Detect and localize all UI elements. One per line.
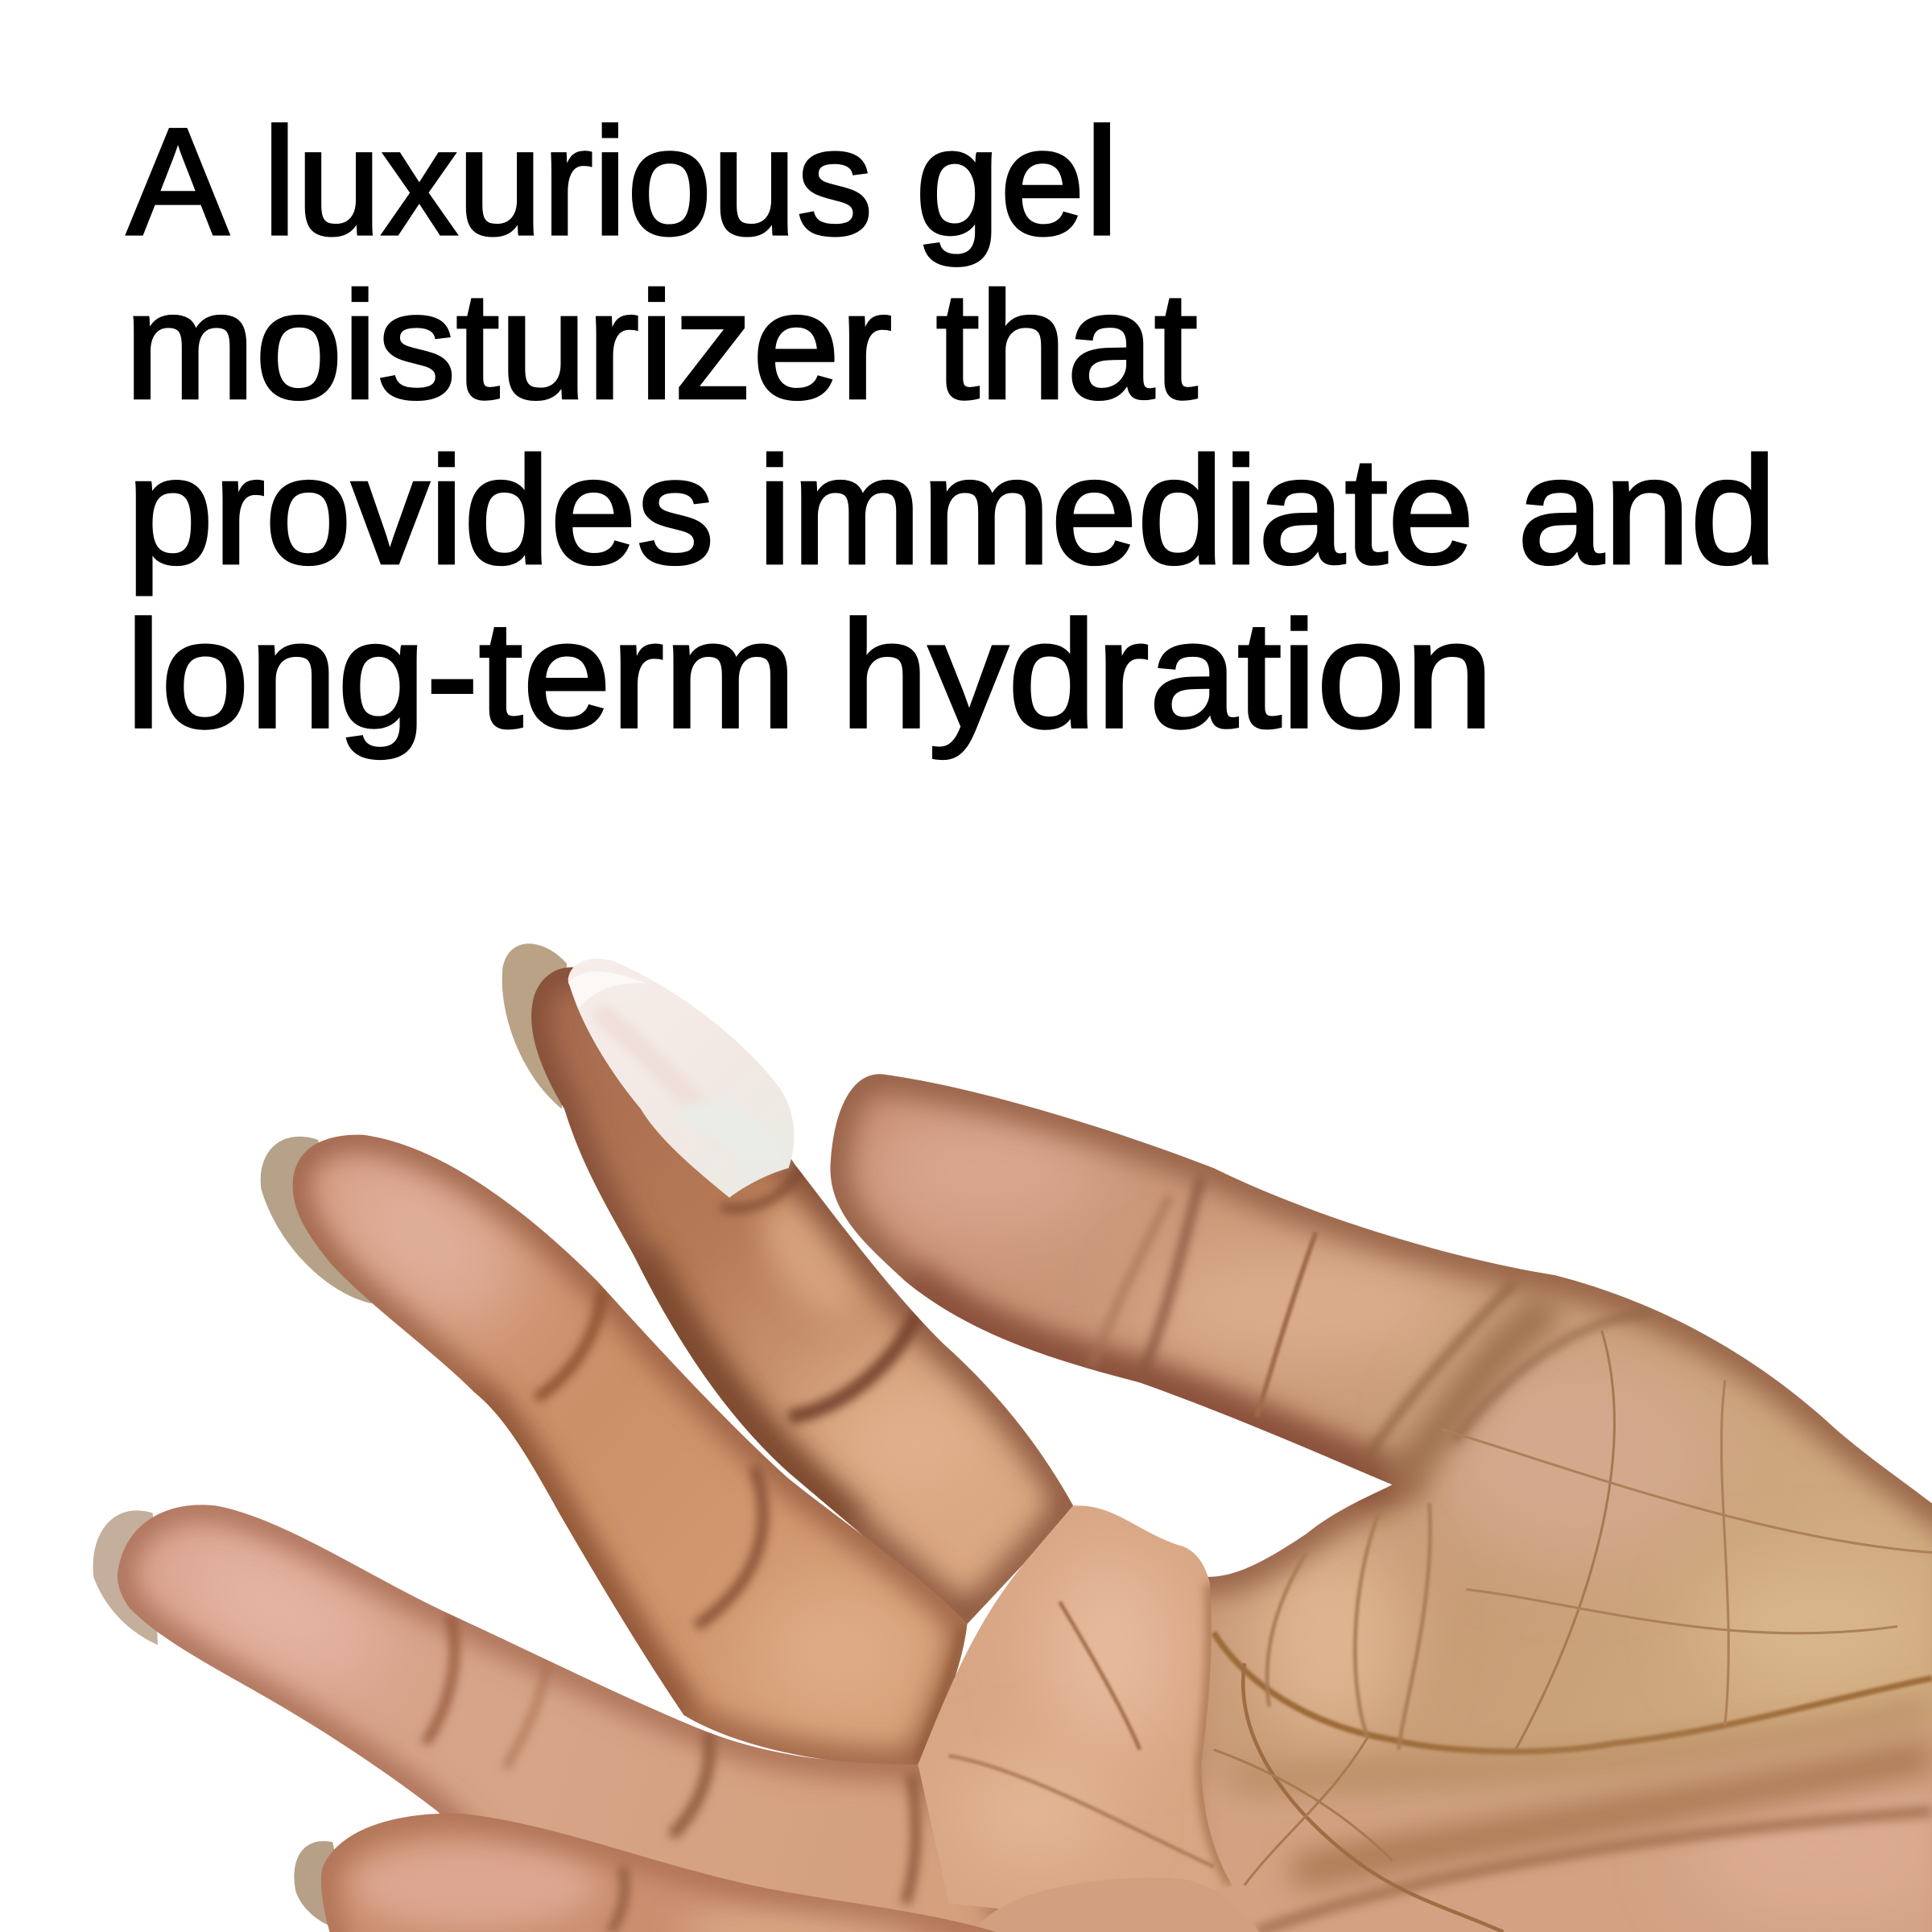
hand photograph illustration [93, 943, 1932, 1932]
title: moisturizer that [125, 261, 1198, 431]
first finger [118, 1505, 1035, 1932]
palm and thumb [831, 1074, 1932, 1932]
nail: second finger [261, 1137, 372, 1303]
nail: bottom finger [294, 1841, 351, 1932]
title [125, 97, 1777, 760]
cream dollop [568, 959, 794, 1198]
palm lower lobe [973, 1878, 1259, 1932]
cream finger [531, 968, 1073, 1624]
nail: first finger [93, 1510, 158, 1645]
title: provides immediate and [127, 426, 1777, 596]
second finger [293, 1119, 968, 1765]
nail: third finger [502, 943, 567, 1109]
thumb mound of palm [918, 1505, 1232, 1909]
title: A luxurious gel [127, 97, 1119, 267]
bottom finger [321, 1814, 1022, 1932]
title: long-term hydration [126, 590, 1493, 760]
